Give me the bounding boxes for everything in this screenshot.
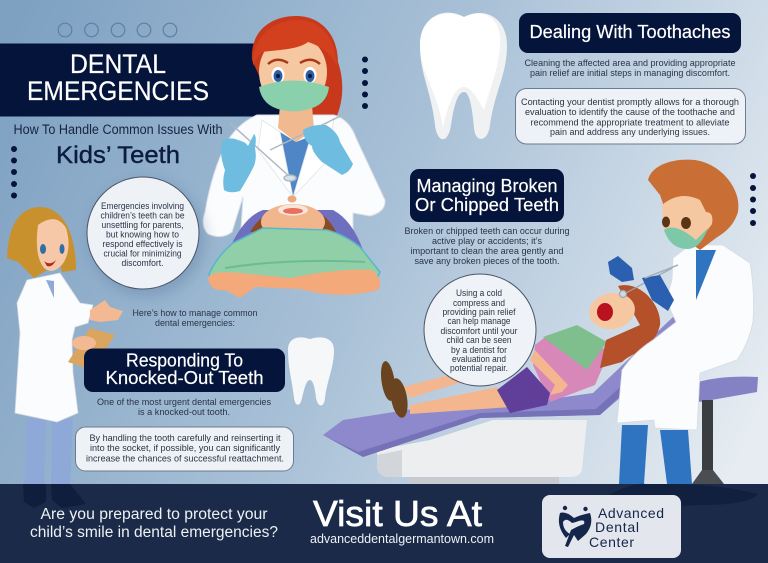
coat bbox=[15, 273, 93, 422]
illustration: teacher dentist with clipboard bbox=[7, 207, 123, 490]
subtitle: How To Handle Common Issues With bbox=[14, 122, 222, 137]
logo wordmark bbox=[589, 505, 664, 550]
girl legs bbox=[403, 376, 510, 414]
face bbox=[259, 34, 327, 110]
heading: toothaches bbox=[519, 13, 741, 53]
girl hair bbox=[600, 285, 660, 368]
footer question: Are you prepared to protect your bbox=[40, 506, 268, 523]
gloves bbox=[608, 256, 634, 282]
dots: left bbox=[11, 146, 17, 198]
girl top bbox=[533, 335, 610, 402]
chair body bbox=[323, 317, 690, 457]
logo icon bbox=[559, 506, 591, 547]
mask bbox=[664, 228, 708, 249]
girl shoes bbox=[379, 360, 410, 419]
logo wordmark: Center bbox=[589, 534, 634, 550]
text: toothache intro bbox=[524, 58, 736, 78]
girl hands bbox=[530, 350, 568, 395]
tip text: compress and bbox=[453, 298, 505, 308]
text: broken teeth intro: Broken or chipped teeth can occur during bbox=[404, 226, 570, 236]
intro text: unsettling for parents, bbox=[102, 220, 184, 230]
footer foot shadows bbox=[23, 484, 758, 508]
intro text: children’s teeth can be bbox=[100, 210, 185, 220]
illustration: dental chair scene bbox=[323, 265, 690, 484]
guiding sentence bbox=[132, 308, 258, 328]
coat bbox=[203, 115, 385, 245]
glove right bbox=[303, 125, 353, 175]
callout: knocked-out tip: into the socket, if possible, you can significantly bbox=[90, 443, 281, 453]
footer call to action: Visit Us At bbox=[313, 493, 482, 534]
logo wordmark: Dental bbox=[595, 519, 639, 535]
patient face bbox=[261, 204, 325, 240]
scrubs bbox=[280, 132, 311, 197]
tip text: child can be seen bbox=[446, 335, 512, 345]
heading: knocked-out teeth: Responding To bbox=[126, 350, 243, 370]
heading: knocked-out teeth: Knocked-Out Teeth bbox=[106, 368, 264, 388]
hand on clipboard bbox=[72, 336, 96, 350]
scrub collar bbox=[46, 280, 54, 298]
text: toothache intro: Cleaning the affected area and providing appropriate bbox=[524, 58, 736, 68]
mouth bbox=[44, 260, 56, 266]
callout: knocked-out tip: By handling the tooth carefully and reinserting it bbox=[90, 433, 281, 443]
girl face bbox=[586, 289, 638, 333]
tip text: Using a cold bbox=[456, 288, 502, 298]
blanket bbox=[209, 228, 380, 284]
hair bbox=[7, 207, 76, 278]
coat bbox=[617, 245, 754, 430]
pants bbox=[619, 425, 692, 484]
illustration: male dentist bbox=[608, 160, 758, 484]
footer call to action: advanceddentalgermantown.com bbox=[310, 532, 494, 546]
text: knocked-out intro: is a knocked-out tooth. bbox=[138, 407, 230, 417]
heading: toothaches: Dealing With Toothaches bbox=[530, 22, 730, 42]
footer question bbox=[30, 506, 278, 541]
title banner bbox=[0, 44, 285, 116]
dots: top centre bbox=[362, 56, 368, 109]
clipboard bbox=[68, 328, 115, 370]
intro bubble bbox=[87, 177, 205, 296]
hair back bbox=[252, 16, 342, 118]
intro text bbox=[100, 201, 185, 268]
footer call to action bbox=[310, 493, 494, 546]
glove left bbox=[221, 134, 256, 192]
open hand bbox=[90, 300, 123, 322]
subtitle highlight: Kids’ Teeth bbox=[56, 142, 180, 169]
hand tool bbox=[645, 265, 678, 278]
girl skirt bbox=[497, 367, 550, 413]
heading: broken teeth bbox=[410, 169, 564, 222]
callout: knocked-out tip bbox=[76, 427, 294, 471]
text: broken teeth intro: save any broken pieces of the tooth. bbox=[414, 256, 560, 266]
heading: broken teeth: Or Chipped Teeth bbox=[415, 195, 559, 215]
patient hair bbox=[250, 210, 336, 232]
patient arms bbox=[208, 270, 380, 298]
intro text: discomfort. bbox=[122, 258, 164, 268]
blanket fold bbox=[225, 261, 365, 268]
text: broken teeth intro bbox=[404, 226, 570, 266]
headrest bbox=[230, 210, 363, 250]
decorative ring row bbox=[58, 23, 177, 37]
logo card bbox=[542, 495, 681, 558]
eyes bbox=[662, 216, 691, 229]
tip text: can help manage bbox=[448, 316, 511, 326]
patient mouth bbox=[278, 204, 308, 216]
mirror tool bbox=[620, 265, 678, 298]
girl mouth bbox=[597, 303, 613, 321]
eyes bbox=[268, 60, 320, 83]
stool bbox=[692, 377, 758, 484]
tip text bbox=[440, 288, 518, 373]
text: broken teeth intro: active play or accidents; it’s bbox=[432, 236, 543, 246]
heading: broken teeth: Managing Broken bbox=[416, 176, 558, 196]
intro text: crucial for minimizing bbox=[104, 248, 182, 258]
face bbox=[37, 219, 69, 271]
intro text: but knowing how to bbox=[106, 230, 179, 240]
title text bbox=[27, 49, 209, 106]
guiding sentence: dental emergencies: bbox=[155, 318, 235, 328]
tip text: discomfort until your bbox=[440, 326, 518, 336]
intro text: respond effectively is bbox=[102, 239, 183, 249]
intro text: Emergencies involving bbox=[101, 201, 184, 211]
fringe bbox=[253, 20, 337, 66]
eyes bbox=[40, 244, 64, 254]
text: broken teeth intro: important to clean the area gently and bbox=[410, 246, 564, 256]
patient nose bbox=[288, 196, 296, 202]
logo wordmark: Advanced bbox=[598, 505, 664, 521]
title text: DENTAL bbox=[70, 49, 166, 79]
text: toothache intro: pain relief are initial steps in managing discomfort. bbox=[530, 68, 730, 78]
footer band bbox=[0, 484, 768, 563]
tip text: evaluation and bbox=[452, 354, 506, 364]
tip bubble bbox=[424, 274, 536, 386]
callout: toothache tip: Contacting your dentist promptly allows for a thorough bbox=[521, 97, 739, 107]
hair bbox=[648, 160, 739, 250]
face bbox=[662, 196, 712, 249]
callout: toothache tip: evaluation to identify the cause of the toothache and bbox=[525, 107, 735, 117]
girl bib bbox=[543, 325, 607, 370]
tip text: providing pain relief bbox=[442, 307, 516, 317]
guiding sentence: Here’s how to manage common bbox=[132, 308, 258, 318]
lapels bbox=[258, 118, 334, 197]
callout: knocked-out tip: increase the chances of successful reattachment. bbox=[86, 454, 284, 464]
title text: EMERGENCIES bbox=[27, 76, 209, 106]
callout: toothache tip: recommend the appropriate treatment to alleviate bbox=[530, 118, 730, 128]
heading: knocked-out teeth bbox=[84, 348, 285, 392]
dots: right bbox=[750, 173, 756, 226]
pants bbox=[24, 418, 73, 490]
text: knocked-out intro bbox=[97, 397, 272, 417]
instruments bbox=[230, 110, 353, 181]
tip text: potential repair. bbox=[450, 363, 508, 373]
callout: toothache tip bbox=[516, 88, 746, 144]
illustration: female dentist with patient bbox=[203, 16, 385, 298]
scrubs bbox=[696, 250, 716, 300]
footer question: child’s smile in dental emergencies? bbox=[30, 524, 278, 541]
chair base bbox=[377, 420, 587, 477]
mask bbox=[259, 80, 329, 112]
text: knocked-out intro: One of the most urgent dental emergencies bbox=[97, 397, 272, 407]
neck bbox=[278, 105, 314, 142]
illustration: large tooth bbox=[420, 13, 507, 139]
tip text: by a dentist for bbox=[451, 345, 507, 355]
illustration: small tooth bbox=[288, 337, 334, 406]
callout: toothache tip: pain and address any underlying issues. bbox=[550, 127, 710, 137]
